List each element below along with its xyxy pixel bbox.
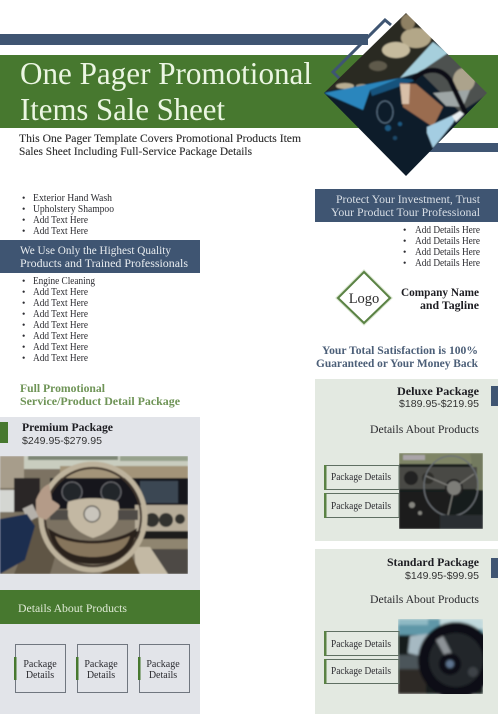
deluxe tab bbox=[491, 386, 498, 406]
left bullet list one: • bbox=[22, 194, 25, 204]
left bullet list one: • bbox=[22, 227, 25, 237]
package details box 2 bbox=[76, 644, 128, 692]
lower right navy bar bbox=[425, 143, 498, 152]
left bullet list one: Add Text Here bbox=[33, 226, 89, 237]
premium heading and price: $249.95-$279.95 bbox=[22, 435, 102, 447]
green details band bbox=[0, 590, 200, 624]
package details box 1 bbox=[14, 644, 66, 692]
left bullet list one: Exterior Hand Wash bbox=[33, 193, 112, 204]
standard package details row 1: Package Details bbox=[331, 639, 391, 650]
green section heading: Full Promotional bbox=[20, 383, 105, 395]
package details box 2: Details bbox=[87, 670, 115, 681]
package details box 2: Package bbox=[84, 659, 118, 670]
deluxe package details row 2: Package Details bbox=[331, 501, 391, 512]
standard package details row 2 bbox=[324, 659, 399, 684]
package details box 3: Package bbox=[146, 659, 180, 670]
left bullet list one: • bbox=[22, 216, 25, 226]
title bbox=[20, 55, 312, 127]
header banner bbox=[0, 8, 498, 180]
standard details heading: Details About Products bbox=[370, 594, 480, 606]
standard package details row 1 bbox=[324, 631, 399, 656]
right bullet list: • bbox=[403, 226, 406, 236]
logo diamond: Logo bbox=[349, 291, 379, 307]
left bullet list two: • bbox=[22, 354, 25, 364]
left bullet list two: • bbox=[22, 299, 25, 309]
deluxe package details row 2 bbox=[324, 493, 399, 518]
deluxe heading and price bbox=[397, 386, 479, 410]
premium heading and price bbox=[22, 422, 113, 447]
left bullet list two: Add Text Here bbox=[33, 320, 89, 331]
left bullet list two: Engine Cleaning bbox=[33, 276, 95, 287]
standard heading and price bbox=[387, 557, 479, 582]
diamond outline bbox=[333, 20, 391, 85]
left bullet list two: • bbox=[22, 332, 25, 342]
left bullet list two: Add Text Here bbox=[33, 331, 89, 342]
right bullet list: Add Details Here bbox=[415, 225, 481, 236]
company name: Company Name bbox=[401, 287, 479, 299]
package details box 1: Package bbox=[23, 659, 57, 670]
subtitle bbox=[19, 133, 301, 158]
right bullet list: Add Details Here bbox=[415, 258, 481, 269]
navy quality banner bbox=[0, 240, 200, 273]
left bullet list one: Add Text Here bbox=[33, 215, 89, 226]
standard package details row 2: Package Details bbox=[331, 666, 391, 677]
left bullet list two: Add Text Here bbox=[33, 287, 89, 298]
right bullet list: • bbox=[403, 259, 406, 269]
left bullet list two bbox=[22, 276, 95, 364]
satisfaction guarantee: Your Total Satisfaction is 100% bbox=[322, 345, 478, 357]
subtitle: This One Pager Template Covers Promotional Products Item bbox=[19, 133, 301, 145]
left bullet list two: Add Text Here bbox=[33, 342, 89, 353]
green section heading: Service/Product Detail Package bbox=[20, 396, 180, 408]
left bullet list two: • bbox=[22, 288, 25, 298]
left bullet list two: • bbox=[22, 277, 25, 287]
standard heading and price: Standard Package bbox=[387, 557, 479, 569]
panel: deluxe package bbox=[315, 379, 498, 541]
navy protect banner: Protect Your Investment, Trust bbox=[336, 194, 481, 206]
package details box 1: Details bbox=[26, 670, 54, 681]
green section heading bbox=[20, 383, 180, 408]
left bullet list two: Add Text Here bbox=[33, 298, 89, 309]
photo: modern steering wheel bbox=[398, 619, 483, 694]
diamond photo: hand on steering wheel bbox=[320, 8, 490, 180]
navy protect banner: Your Product Tour Professional bbox=[331, 207, 480, 219]
left bullet list two: • bbox=[22, 310, 25, 320]
left bullet list one bbox=[22, 193, 114, 237]
left bullet list one: • bbox=[22, 205, 25, 215]
left bullet list two: Add Text Here bbox=[33, 309, 89, 320]
company name: and Tagline bbox=[420, 300, 479, 312]
panel: standard package bbox=[315, 549, 498, 714]
navy protect banner bbox=[315, 189, 498, 222]
navy quality banner: We Use Only the Highest Quality bbox=[20, 245, 171, 257]
left bullet list two: Add Text Here bbox=[33, 353, 89, 364]
left bullet list one: Upholstery Shampoo bbox=[33, 204, 114, 215]
subtitle: Sales Sheet Including Full-Service Package Details bbox=[19, 146, 253, 158]
deluxe package details row 1 bbox=[324, 465, 399, 490]
panel: premium package bbox=[0, 417, 200, 714]
right bullet list: • bbox=[403, 248, 406, 258]
deluxe package details row 1: Package Details bbox=[331, 472, 391, 483]
left bullet list two: • bbox=[22, 343, 25, 353]
standard tab bbox=[491, 558, 498, 578]
green title band bbox=[0, 55, 498, 128]
photo: vintage steering wheel bbox=[399, 453, 483, 529]
right bullet list: Add Details Here bbox=[415, 247, 481, 258]
package details box 3 bbox=[138, 644, 190, 692]
title: One Pager Promotional bbox=[20, 55, 312, 91]
satisfaction guarantee bbox=[316, 345, 479, 370]
right bullet list: • bbox=[403, 237, 406, 247]
deluxe heading and price: $189.95-$219.95 bbox=[399, 398, 479, 410]
logo diamond bbox=[338, 272, 390, 323]
right bullet list: Add Details Here bbox=[415, 236, 481, 247]
title: Items Sale Sheet bbox=[20, 91, 225, 127]
premium heading and price: Premium Package bbox=[22, 422, 113, 434]
company name bbox=[401, 287, 479, 312]
left bullet list two: • bbox=[22, 321, 25, 331]
premium tab bbox=[0, 422, 8, 443]
photo: luxury steering wheel bbox=[0, 456, 188, 574]
package details box 3: Details bbox=[149, 670, 177, 681]
satisfaction guarantee: Guaranteed or Your Money Back bbox=[316, 358, 479, 370]
navy quality banner: Products and Trained Professionals bbox=[20, 258, 189, 270]
standard heading and price: $149.95-$99.95 bbox=[405, 570, 479, 582]
deluxe details heading: Details About Products bbox=[370, 424, 480, 436]
top navy bar bbox=[0, 34, 368, 45]
right bullet list bbox=[403, 225, 481, 269]
deluxe heading and price: Deluxe Package bbox=[397, 386, 479, 398]
green details band: Details About Products bbox=[18, 603, 128, 615]
